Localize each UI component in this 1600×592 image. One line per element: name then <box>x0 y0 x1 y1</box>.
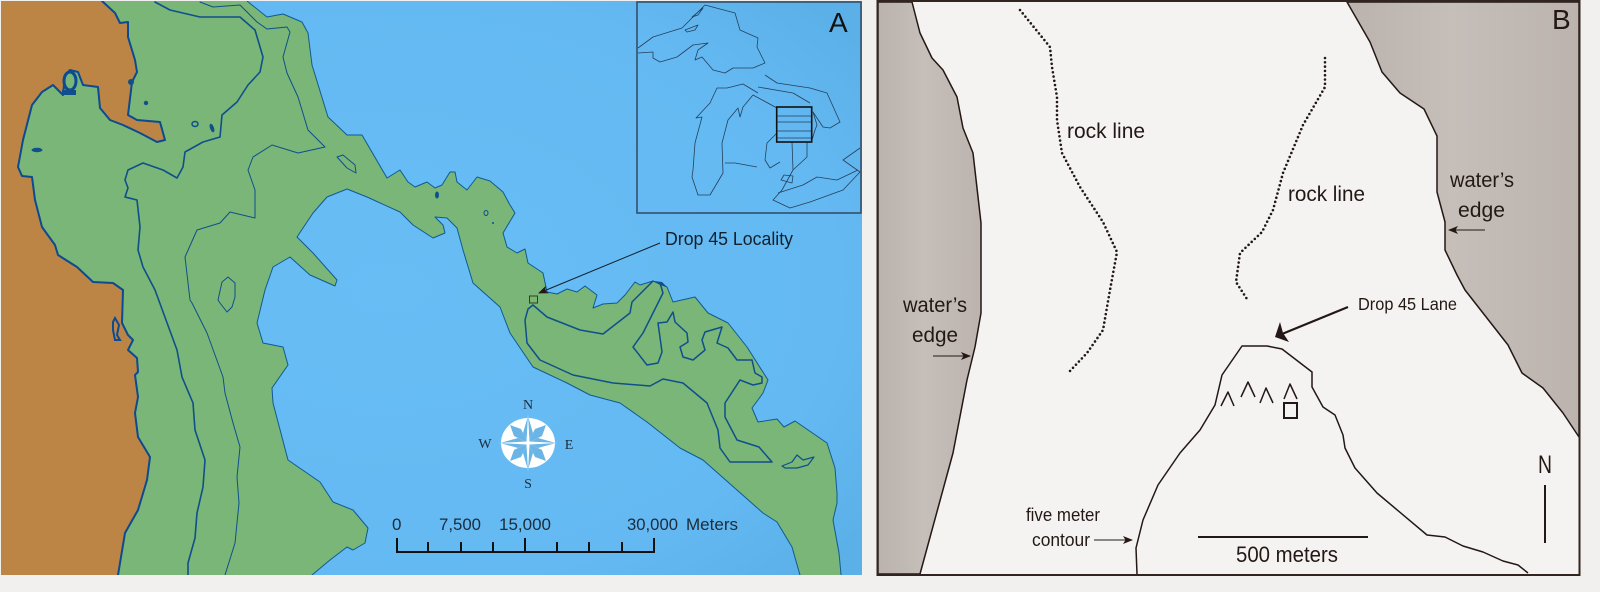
panel frame <box>878 1 1580 575</box>
contour lines <box>125 2 814 575</box>
ponds and small lakes <box>32 72 667 340</box>
scale bar: Meters <box>686 515 738 534</box>
water background <box>248 1 862 575</box>
compass rose <box>478 398 573 492</box>
rock line east <box>1236 58 1325 299</box>
inset study-area box <box>777 107 812 142</box>
north arrow <box>1538 451 1552 543</box>
compass rose: N <box>523 398 533 413</box>
scale bar <box>392 515 738 552</box>
inset: Great Lakes locator <box>637 2 861 213</box>
north arrow: N <box>1538 451 1552 479</box>
five meter contour label: contour <box>1032 530 1090 550</box>
water's edge label west: water’s <box>902 294 967 317</box>
Drop 45 Lane label: Drop 45 Lane <box>1358 294 1457 314</box>
water's edge label east: water’s <box>1449 169 1514 192</box>
five meter contour label: five meter <box>1026 505 1100 525</box>
water's edge label west: edge <box>912 324 958 347</box>
panel letter B: B <box>1552 4 1571 35</box>
water's edge label west <box>902 294 970 356</box>
rock line west <box>1020 10 1117 372</box>
water's edge label east <box>1449 169 1514 230</box>
orange bedrock region <box>0 0 165 585</box>
compass rose: E <box>565 438 573 453</box>
locality marker <box>530 296 538 303</box>
rock line label west: rock line <box>1067 120 1145 143</box>
five meter contour label <box>1026 505 1132 550</box>
panel background <box>878 1 1580 575</box>
site markers <box>1221 382 1297 418</box>
west water area <box>878 2 981 574</box>
panel B: local sketch map <box>878 1 1580 575</box>
scale bar: 0 <box>392 515 401 534</box>
500 meter scale: 500 meters <box>1236 542 1338 567</box>
rock line label east: rock line <box>1288 183 1365 206</box>
compass rose: S <box>524 477 532 492</box>
green land mass <box>0 0 842 585</box>
locality label: Drop 45 Locality <box>665 228 794 249</box>
Drop 45 Lane arrow <box>1275 307 1348 342</box>
five meter contour <box>1136 346 1528 574</box>
scale bar: 15,000 <box>499 515 551 534</box>
locality leader arrow <box>539 243 660 293</box>
compass rose: W <box>478 437 492 452</box>
panel letter A: A <box>829 7 848 38</box>
scale bar: 30,000 <box>627 515 678 534</box>
east water area <box>1347 2 1579 437</box>
scale bar: 7,500 <box>439 515 481 534</box>
water's edge label east: edge <box>1458 199 1505 222</box>
panel A: regional map <box>0 0 862 585</box>
